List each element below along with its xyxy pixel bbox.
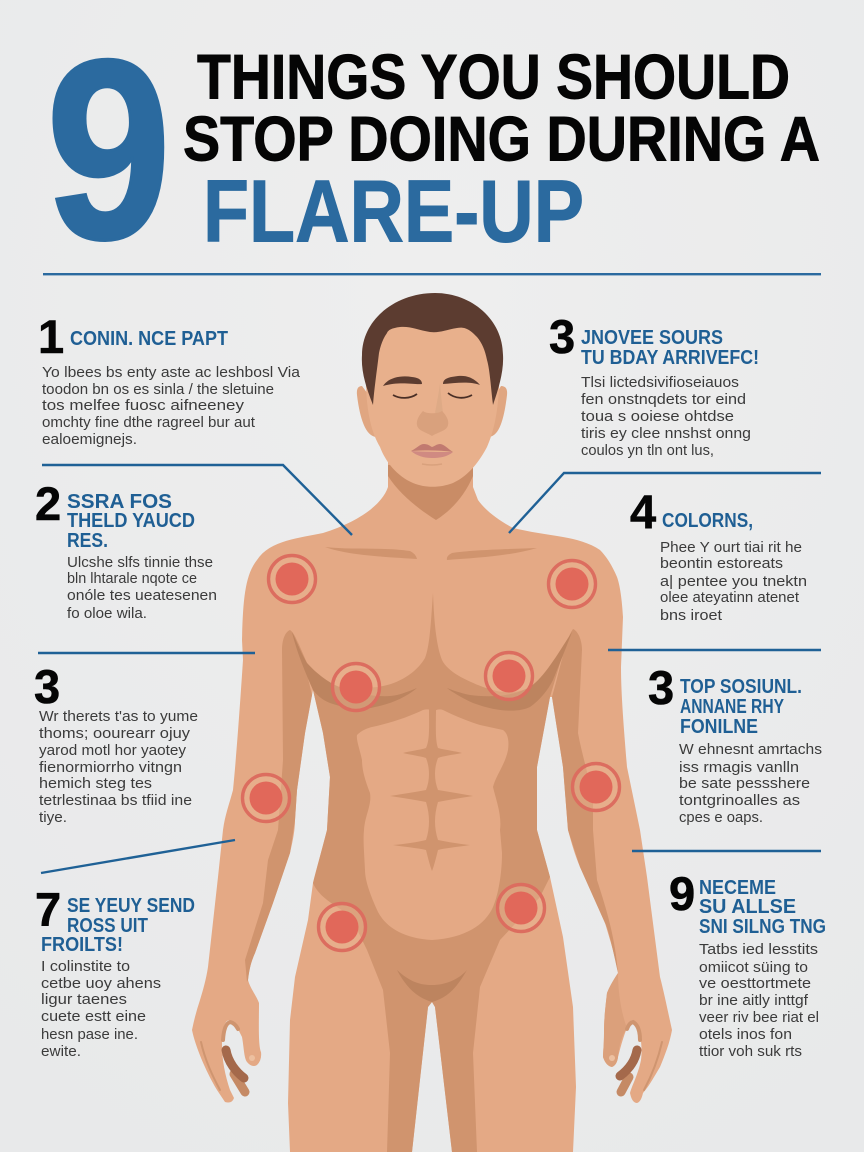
heading: SE YEUY SEND — [67, 894, 195, 917]
body text: yarod motl hor yaotey — [39, 743, 187, 759]
body text: toua s ooiese ohtdse — [581, 409, 734, 425]
body silhouette — [192, 440, 672, 1152]
abdominal grooves — [390, 708, 473, 871]
marker: right chest — [486, 652, 532, 700]
body text: thoms; oourearr ojuy — [39, 726, 191, 742]
marker: right elbow — [572, 764, 620, 810]
marker: right shoulder — [548, 560, 596, 608]
body text: be sate pessshere — [679, 776, 810, 792]
body text: a| pentee you tnektn — [660, 574, 807, 590]
body text: I colinstite to — [41, 959, 130, 975]
abdominal block — [357, 709, 508, 940]
neck shadow — [388, 465, 473, 520]
body text: beontin estoreats — [660, 556, 783, 572]
panel: item 3 right middle — [648, 661, 822, 826]
body text: Phee Y ourt tiai rit he — [660, 540, 802, 556]
hand details — [201, 1022, 662, 1092]
torso shading — [297, 593, 567, 1152]
number: 3 — [34, 660, 60, 713]
body text: coulos yn tln ont lus, — [581, 443, 714, 459]
marker: left elbow — [242, 774, 290, 822]
left chest crease — [292, 632, 417, 709]
left ear — [357, 386, 376, 437]
body text — [67, 555, 217, 622]
body text: fen onstnqdets tor eind — [581, 392, 746, 408]
body figure — [192, 293, 672, 1152]
body text: otels inos fon — [699, 1027, 792, 1043]
heading — [680, 675, 802, 738]
inflammation markers — [242, 556, 620, 950]
number: 7 — [35, 883, 61, 936]
body text — [679, 742, 822, 826]
heading: TOP SOSIUNL. — [680, 675, 802, 698]
heading: NECEME — [699, 876, 776, 899]
panel: item 3 left — [34, 660, 198, 826]
body text: ttior voh suk rts — [699, 1044, 802, 1060]
title line 3: FLARE-UP — [203, 162, 584, 260]
body text: tiye. — [39, 810, 67, 826]
hair — [362, 293, 503, 405]
body text: tos melfee fuosc aifneeney — [42, 398, 245, 414]
heading: FROILTS! — [41, 933, 123, 956]
heading: SSRA FOS — [67, 490, 172, 513]
body text: cuete estt eine — [41, 1009, 146, 1025]
nose — [417, 411, 448, 436]
heading: FONILNE — [680, 715, 758, 738]
panel: item 2 — [35, 477, 217, 622]
body text: bns iroet — [660, 608, 722, 624]
big number 9: 9 — [46, 8, 171, 293]
body text: toodon bn os es sinla / the sletuine — [42, 382, 274, 398]
heading: COLORNS, — [662, 509, 753, 532]
nose bridge — [435, 383, 443, 413]
marker: left shoulder — [268, 556, 316, 602]
heading: ROSS UIT — [67, 914, 148, 937]
title — [46, 8, 820, 293]
heading: THELD YAUCD — [67, 509, 195, 532]
heading: TU BDAY ARRIVEFC! — [581, 346, 759, 369]
collarbones — [325, 547, 417, 559]
body text: ligur taenes — [41, 992, 127, 1008]
marker: right hip — [498, 884, 544, 932]
left arm shading — [245, 630, 312, 982]
body text: tiris ey clee nnshst onng — [581, 426, 751, 442]
body text: ve oesttortmete — [699, 976, 811, 992]
body text: onóle tes ueatesenen — [67, 588, 217, 604]
body text: olee ateyatinn atenet — [660, 590, 799, 606]
face — [366, 318, 499, 487]
heading — [67, 490, 195, 552]
heading: SNI SILNG TNG — [699, 915, 826, 938]
body text: Wr therets t'as to yume — [39, 709, 198, 725]
panel: item 4 — [630, 485, 807, 624]
number: 1 — [38, 310, 64, 363]
heading: RES. — [67, 529, 108, 552]
eyes closed — [393, 393, 472, 398]
body text: omchty fine dthe ragreel bur aut — [42, 415, 255, 431]
body text: Yo lbees bs enty aste ac leshbosl Via — [42, 365, 301, 381]
chin crease — [422, 464, 442, 465]
body text: br ine aitly inttgf — [699, 993, 809, 1009]
body text: cpes e oaps. — [679, 810, 763, 826]
body text: fo oloe wila. — [67, 606, 147, 622]
title line 1: THINGS YOU SHOULD — [197, 42, 790, 112]
body text — [699, 942, 819, 1060]
number: 4 — [630, 485, 656, 538]
mouth — [411, 444, 453, 458]
body text: Ulcshe slfs tinnie thse — [67, 555, 213, 571]
marker: left hip — [318, 904, 366, 950]
eyebrows — [383, 376, 422, 386]
right thumb shading — [603, 973, 627, 1067]
number: 3 — [549, 310, 575, 363]
right ear — [489, 386, 507, 437]
panel: item 7 — [35, 883, 195, 1060]
heading: CONIN. NCE PAPT — [70, 327, 228, 350]
number: 3 — [648, 661, 674, 714]
body text: ealoemignejs. — [42, 432, 137, 448]
heading — [41, 894, 195, 956]
heading: SU ALLSE — [699, 895, 796, 918]
body text — [581, 375, 751, 459]
panel: item 9 — [669, 867, 826, 1060]
body text — [39, 709, 198, 826]
leader lines — [38, 465, 821, 873]
body text: fienormiorrho vitngn — [39, 760, 182, 776]
marker: left chest — [332, 664, 380, 710]
right chest crease — [447, 632, 572, 711]
body text — [41, 959, 161, 1060]
body text: veer riv bee riat el — [699, 1010, 819, 1026]
heading — [699, 876, 826, 938]
number: 9 — [669, 867, 695, 920]
body text: hemich steg tes — [39, 776, 152, 792]
body text: ewite. — [41, 1044, 81, 1060]
body text: bln lhtarale nqote ce — [67, 571, 197, 587]
panel: item 1 — [38, 310, 301, 448]
panel: item 3 right top — [549, 310, 759, 459]
body text: cetbe uoy ahens — [41, 976, 161, 992]
body text — [660, 540, 807, 624]
heading: JNOVEE SOURS — [581, 326, 723, 349]
heading: ANNANE RHY — [680, 695, 784, 718]
heading — [581, 326, 759, 369]
body text: Tatbs ied lesstits — [699, 942, 818, 958]
body text: hesn pase ine. — [41, 1027, 138, 1043]
groin crease — [397, 970, 467, 1002]
body text: tetrlestinaa bs tfiid ine — [39, 793, 192, 809]
body text: tontgrinoalles as — [679, 793, 800, 809]
number: 2 — [35, 477, 61, 530]
body text: Tlsi lictedsivifioseiauos — [581, 375, 739, 391]
body text: iss rmagis vanlln — [679, 760, 799, 776]
right arm shading — [552, 629, 618, 973]
body text — [42, 365, 301, 448]
body text: W ehnesnt amrtachs — [679, 742, 822, 758]
body text: omiicot süing to — [699, 960, 808, 976]
